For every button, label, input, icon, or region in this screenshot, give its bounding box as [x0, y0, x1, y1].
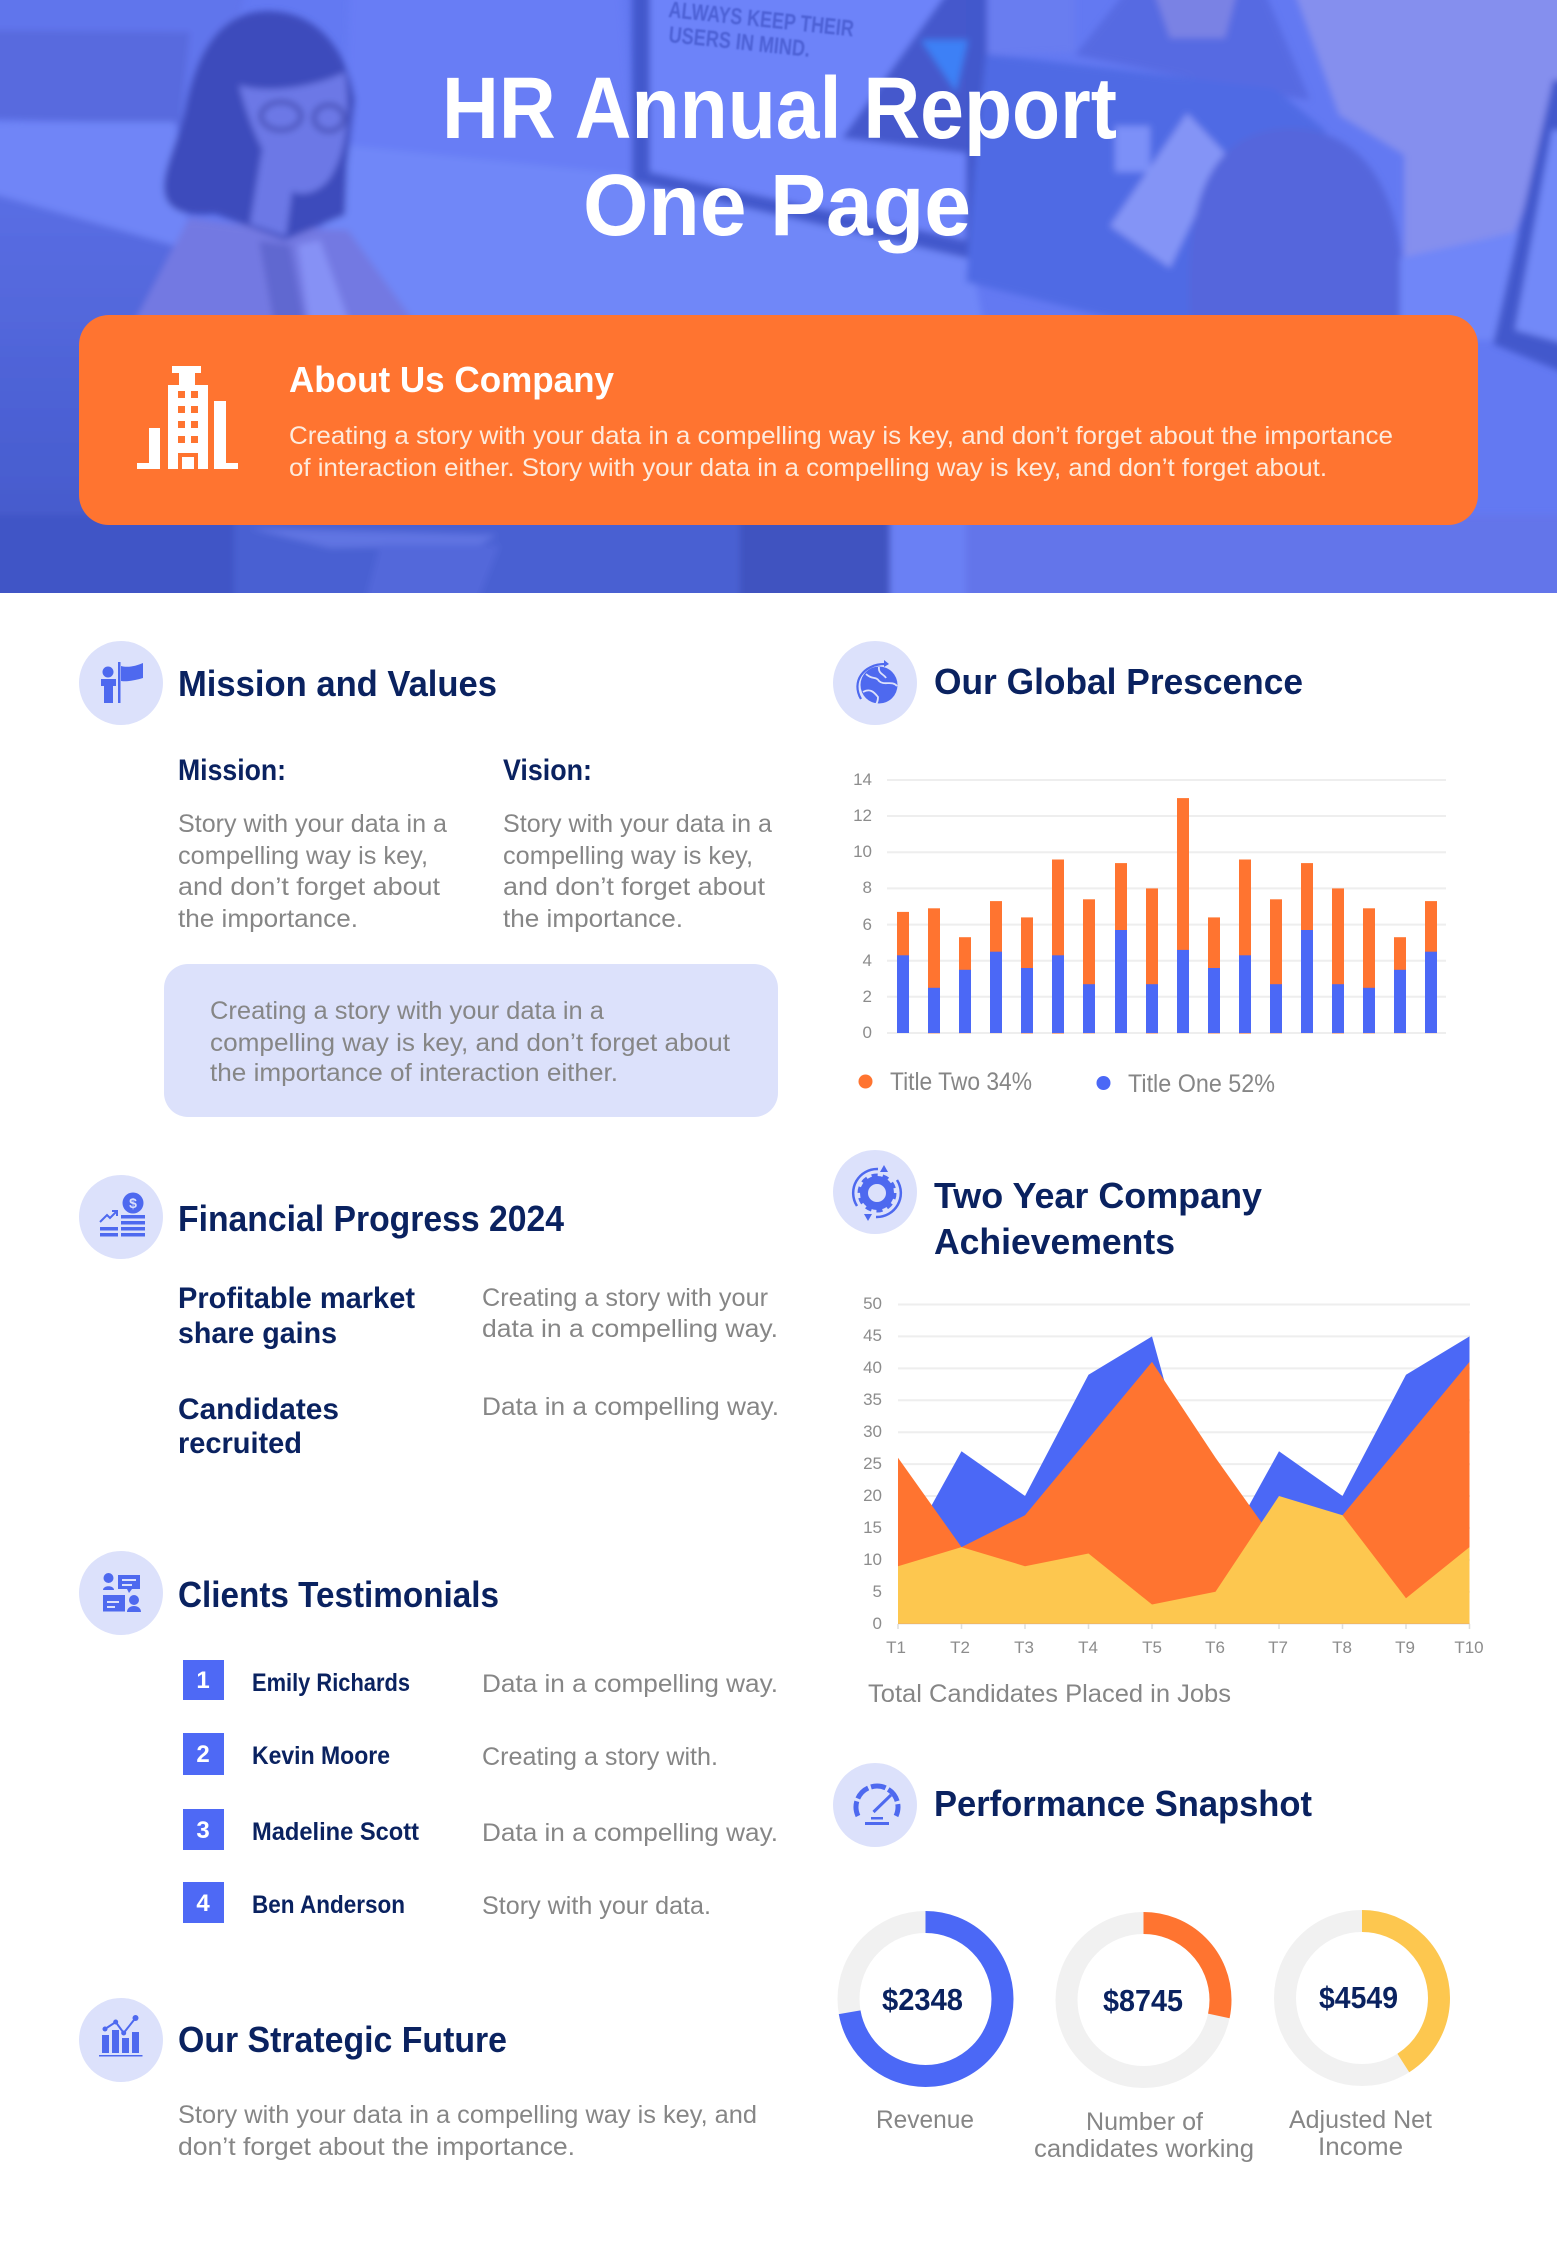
- panel: performance snapshot: [833, 1763, 1439, 2163]
- chart caption: Total Candidates Placed in Jobs: [868, 1680, 1231, 1708]
- panel: about us company: [79, 315, 1478, 525]
- donut: revenue: [848, 1922, 1002, 2134]
- callout: Creating a story with your data in a: [210, 997, 604, 1025]
- area chart: 35: [863, 1390, 882, 1409]
- panel: strategic future: [79, 1998, 757, 2161]
- heading: Clients Testimonials: [178, 1574, 499, 1615]
- item: candidates: [178, 1393, 779, 1460]
- testimonial 4: Ben Anderson: [252, 1891, 405, 1919]
- vision block: the importance.: [503, 905, 683, 933]
- area chart: T6: [1205, 1638, 1225, 1657]
- testimonial 3: 3: [196, 1817, 210, 1844]
- area chart: [863, 1294, 1484, 1657]
- donut: revenue: Revenue: [876, 2106, 974, 2134]
- mission block: [178, 754, 447, 933]
- mission block: compelling way is key,: [178, 842, 428, 870]
- bar chart: 4: [863, 951, 872, 970]
- testimonial 2: 2: [196, 1741, 210, 1768]
- item: candidates: Data in a compelling way.: [482, 1393, 779, 1421]
- legend: [858, 1068, 1275, 1098]
- bar chart: 10: [853, 842, 872, 861]
- bar chart: 14: [853, 770, 872, 789]
- area chart: 5: [873, 1582, 882, 1601]
- title: [442, 60, 1117, 254]
- area chart: 50: [863, 1294, 882, 1313]
- area chart: 10: [863, 1550, 882, 1569]
- area chart: T5: [1142, 1638, 1162, 1657]
- bar chart: [853, 770, 1446, 1042]
- vision block: [503, 754, 772, 933]
- area chart: 20: [863, 1486, 882, 1505]
- mission block: and don’t forget about: [178, 873, 440, 901]
- heading: Our Global Prescence: [934, 661, 1303, 702]
- area chart: 30: [863, 1422, 882, 1441]
- about text: [289, 422, 1393, 482]
- testimonial 4: [183, 1882, 711, 1923]
- area chart: 0: [873, 1614, 882, 1633]
- bar chart: 6: [863, 915, 872, 934]
- hero background photo: [0, 0, 1557, 625]
- mission block: Mission:: [178, 754, 286, 787]
- heading: Our Strategic Future: [178, 2019, 507, 2060]
- icon: growth chart: [79, 1998, 163, 2082]
- text: Story with your data in a compelling way is key, and: [178, 2101, 757, 2129]
- vision block: Story with your data in a: [503, 810, 772, 838]
- testimonial 2: Creating a story with.: [482, 1743, 718, 1771]
- item: market share: share gains: [178, 1317, 337, 1350]
- panel: clients testimonials: [79, 1551, 778, 1923]
- item: market share: data in a compelling way.: [482, 1315, 778, 1343]
- area chart: T8: [1332, 1638, 1352, 1657]
- panel: two year achievements: [833, 1150, 1484, 1708]
- area chart: T4: [1078, 1638, 1098, 1657]
- icon: gauge: [833, 1763, 917, 1847]
- about heading: About Us Company: [289, 359, 614, 400]
- bar chart: 8: [863, 878, 872, 897]
- area chart: T10: [1454, 1638, 1484, 1657]
- text: [178, 2101, 757, 2161]
- vision block: compelling way is key,: [503, 842, 753, 870]
- area chart: T2: [950, 1638, 970, 1657]
- donut: revenue: $2348: [882, 1982, 963, 2017]
- testimonial 2: Kevin Moore: [252, 1742, 390, 1770]
- area chart: 45: [863, 1326, 882, 1345]
- bar chart: 12: [853, 806, 872, 825]
- testimonial 3: Data in a compelling way.: [482, 1819, 778, 1847]
- poster text in photo: USERS IN MIND.: [667, 21, 811, 62]
- icon: gear: [833, 1150, 917, 1234]
- heading: Two Year Company: [934, 1175, 1262, 1216]
- donut: adjusted net income: Income: [1318, 2133, 1403, 2161]
- icon: flag: [79, 641, 163, 725]
- testimonial 4: Story with your data.: [482, 1892, 711, 1920]
- area chart: T3: [1014, 1638, 1034, 1657]
- title: HR Annual Report: [442, 60, 1117, 157]
- item: market share: [178, 1282, 778, 1350]
- panel: mission and values: [79, 641, 778, 1117]
- icon: coins and chart: [79, 1175, 163, 1259]
- icon: globe: [833, 641, 917, 725]
- donut: adjusted net income: [1285, 1921, 1439, 2161]
- callout: [164, 964, 778, 1117]
- donut: candidates working: [1034, 1923, 1254, 2163]
- legend: Title Two 34%: [890, 1068, 1032, 1096]
- area chart: 15: [863, 1518, 882, 1537]
- legend: Title One 52%: [1128, 1070, 1275, 1098]
- mission block: Story with your data in a: [178, 810, 447, 838]
- testimonial 1: 1: [196, 1667, 210, 1694]
- title: One Page: [583, 157, 971, 254]
- item: candidates: recruited: [178, 1427, 302, 1460]
- area chart: T1: [886, 1638, 906, 1657]
- icon: coins and chart: $: [129, 1195, 137, 1211]
- donut: candidates working: $8745: [1103, 1983, 1183, 2018]
- vision block: Vision:: [503, 754, 592, 787]
- icon: chat people: [79, 1551, 163, 1635]
- testimonial 4: 4: [196, 1890, 210, 1917]
- text: don’t forget about the importance.: [178, 2133, 575, 2161]
- donut: candidates working: candidates working: [1034, 2135, 1254, 2163]
- heading: Mission and Values: [178, 663, 497, 704]
- panel: financial progress: [79, 1175, 779, 1460]
- testimonial 1: Emily Richards: [252, 1669, 410, 1697]
- mission block: the importance.: [178, 905, 358, 933]
- donut: adjusted net income: Adjusted Net: [1289, 2106, 1432, 2134]
- testimonial 2: [183, 1733, 718, 1775]
- testimonial 3: [183, 1809, 778, 1850]
- heading: [934, 1175, 1262, 1262]
- testimonial 1: [183, 1660, 778, 1700]
- heading: Achievements: [934, 1221, 1175, 1262]
- bar chart: 0: [863, 1023, 872, 1042]
- poster text in photo: [668, 2, 854, 57]
- donut: candidates working: Number of: [1086, 2108, 1203, 2136]
- icon: building: [137, 366, 238, 469]
- area chart: 40: [863, 1358, 882, 1377]
- testimonial 1: Data in a compelling way.: [482, 1670, 778, 1698]
- area chart: T7: [1268, 1638, 1288, 1657]
- vision block: and don’t forget about: [503, 873, 765, 901]
- area chart: 25: [863, 1454, 882, 1473]
- item: market share: Creating a story with your: [482, 1284, 768, 1312]
- bar chart: 2: [863, 987, 872, 1006]
- about text: of interaction either. Story with your data in a compelling way is key, and don’t forget about.: [289, 454, 1327, 482]
- area chart: T9: [1395, 1638, 1415, 1657]
- testimonial 3: Madeline Scott: [252, 1818, 420, 1846]
- donut: adjusted net income: $4549: [1319, 1980, 1398, 2015]
- item: candidates: Candidates: [178, 1393, 339, 1426]
- callout: compelling way is key, and don’t forget about: [210, 1029, 730, 1057]
- heading: Performance Snapshot: [934, 1783, 1312, 1824]
- about text: Creating a story with your data in a compelling way is key, and don’t forget about the importance: [289, 422, 1393, 450]
- heading: Financial Progress 2024: [178, 1198, 564, 1239]
- callout: the importance of interaction either.: [210, 1059, 618, 1087]
- item: market share: Profitable market: [178, 1282, 415, 1315]
- panel: global presence: [833, 641, 1446, 1098]
